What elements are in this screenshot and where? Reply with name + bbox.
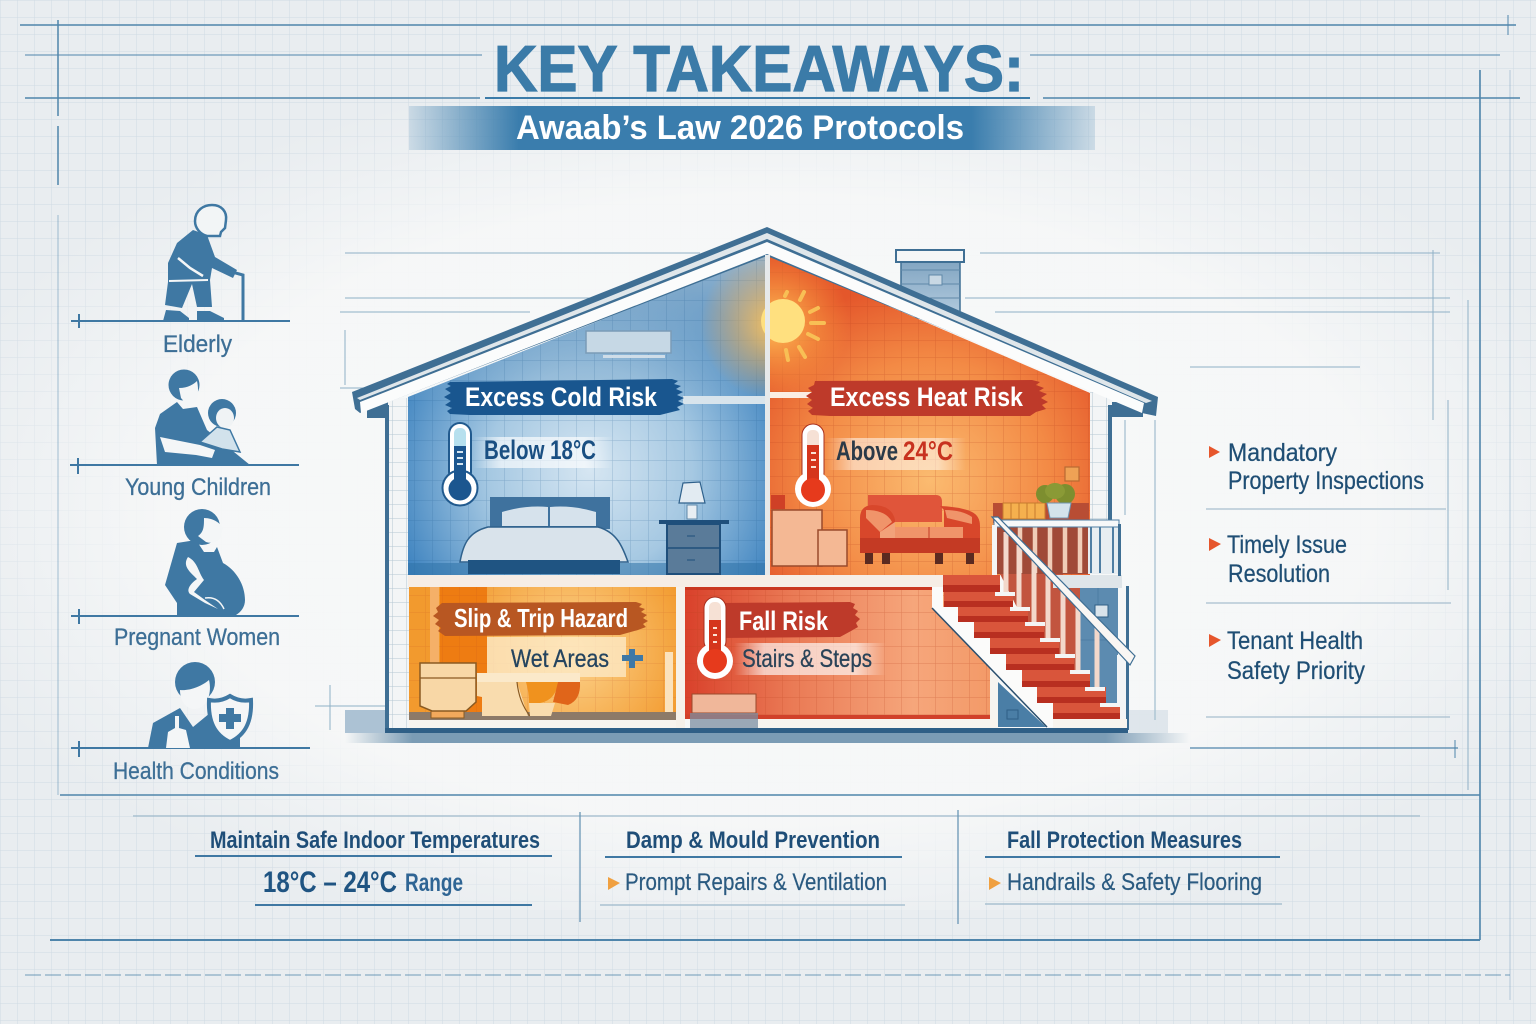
block: damp and mould: Damp & Mould Prevention (626, 827, 880, 854)
centre wall and floor (408, 255, 998, 587)
room: fall risk (685, 587, 990, 728)
icon: person with health shield (71, 662, 310, 757)
reading: above 24C (826, 436, 966, 470)
balcony wall and under-stair wall (990, 503, 1129, 730)
label: fall risk (722, 602, 860, 638)
room: hot living room (761, 255, 1090, 575)
item: timely issue resolution (1209, 531, 1347, 588)
icon: elderly person (71, 205, 290, 328)
label: young children: Young Children (125, 474, 271, 501)
thermometer: cold (442, 423, 478, 506)
stair balusters (1006, 532, 1097, 687)
reading: above 24C: 24°C (903, 436, 953, 466)
subtitle banner (409, 106, 1095, 150)
air conditioner (586, 331, 671, 358)
wall picture (1065, 467, 1079, 481)
block: safe temperatures (195, 827, 552, 905)
block: fall protection (985, 827, 1282, 904)
room: bathroom wet area (409, 587, 676, 720)
block: safe temperatures: Maintain Safe Indoor Temperatures (210, 827, 540, 854)
label: slip and trip hazard: Slip & Trip Hazard (454, 603, 628, 633)
item: tenant health safety priority: Safety Priority (1227, 657, 1365, 685)
label: fall risk: Fall Risk (739, 606, 829, 636)
block: fall protection: Handrails & Safety Flooring (1007, 869, 1262, 896)
bedside table and lamp (659, 482, 729, 574)
sofa (860, 495, 980, 564)
icon: pregnant woman (71, 509, 299, 624)
exterior walls (385, 392, 1112, 730)
label: health conditions: Health Conditions (113, 758, 279, 785)
panel: vulnerable groups (70, 205, 310, 785)
block: damp and mould: Prompt Repairs & Ventilation (625, 869, 887, 896)
item: mandatory property inspections (1209, 439, 1424, 495)
item: tenant health safety priority (1209, 627, 1365, 685)
chimney (896, 250, 964, 318)
item: timely issue resolution: Resolution (1228, 560, 1330, 588)
thermometer: fall (697, 597, 733, 679)
icon: plus (622, 649, 643, 668)
label: excess cold risk: Excess Cold Risk (465, 382, 658, 412)
item: mandatory property inspections: Mandatory (1228, 439, 1337, 467)
thermometer: hot (795, 424, 831, 507)
room: cold bedroom (408, 255, 765, 575)
item: timely issue resolution: Timely Issue (1227, 531, 1347, 559)
subtitle banner: Awaab’s Law 2026 Protocols (516, 109, 964, 147)
floor slabs (385, 587, 1128, 733)
icon: sun (761, 292, 824, 360)
title: KEY TAKEAWAYS: (494, 32, 1024, 105)
staircase (932, 517, 1135, 727)
block: fall protection: Fall Protection Measures (1007, 827, 1242, 854)
block: safe temperatures: Range (405, 869, 463, 897)
icon: adult with child (70, 370, 299, 474)
block: damp and mould (600, 827, 905, 905)
roof (352, 227, 1158, 418)
toilet and basin (420, 663, 580, 718)
block: safe temperatures: 18°C – 24°C (263, 866, 397, 899)
radiator and plant (1003, 483, 1075, 519)
label: elderly: Elderly (163, 331, 232, 358)
panel: bottom summary (133, 810, 1420, 924)
label: pregnant women: Pregnant Women (114, 624, 280, 651)
item: mandatory property inspections: Property Inspections (1228, 467, 1424, 495)
reading: below 18C: Below 18°C (484, 435, 596, 465)
house cross-section (345, 227, 1190, 743)
panel: requirements list (1206, 439, 1451, 717)
reading: stairs and steps: Stairs & Steps (742, 645, 872, 673)
balcony and railing (992, 483, 1122, 588)
item: tenant health safety priority: Tenant Health (1227, 627, 1363, 655)
storage boxes (771, 495, 847, 566)
bed (460, 497, 628, 574)
ground shadow (345, 710, 1190, 743)
reading: wet areas: Wet Areas (511, 645, 609, 673)
label: excess heat risk: Excess Heat Risk (830, 382, 1024, 412)
reading: above 24C: Above (836, 436, 898, 466)
handrail (992, 517, 1135, 665)
